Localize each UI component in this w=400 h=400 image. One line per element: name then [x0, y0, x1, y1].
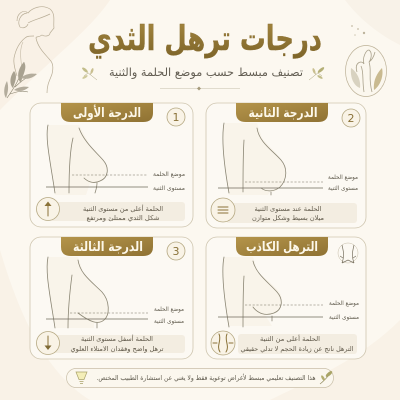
- heading tab: [236, 237, 328, 256]
- disclaimer text: هذا التصنيف تعليمي مبسط لأغراض توعوية فقط ولا يغني عن استشارة الطبيب المختص.: [96, 373, 316, 382]
- description: الحلمة أعلى من الثنية: [260, 334, 320, 343]
- heading tab: [61, 237, 153, 256]
- heading tab: الترهل الكاذب: [246, 240, 318, 255]
- level labels: موضع الحلمة: [328, 174, 358, 181]
- number badge: 3: [172, 245, 180, 258]
- panel: third degree: [30, 237, 193, 359]
- panel: second degree: [206, 103, 366, 228]
- illustration: woman silhouette with branch: [4, 7, 54, 98]
- panel: false sagging: [206, 237, 366, 359]
- description: الحلمة أسفل مستوى الثنية: [81, 334, 153, 343]
- level labels: موضع الحلمة: [153, 171, 185, 178]
- icon: left leaf sprig: [81, 67, 97, 80]
- description: الحلمة أعلى من مستوى الثنية: [83, 204, 163, 213]
- number badge: 1: [172, 111, 180, 124]
- level labels: مستوى الثنية: [328, 185, 358, 192]
- description: [50, 334, 185, 353]
- number badge: [167, 242, 185, 260]
- level labels: [153, 171, 185, 192]
- description: ترهل واضح وفقدان الامتلاء العلوي: [70, 345, 164, 353]
- level labels: [329, 300, 359, 321]
- heading tab: الدرجة الثانية: [248, 106, 318, 121]
- heading tab: الدرجة الأولى: [73, 104, 141, 121]
- disclaimer pill: [66, 368, 334, 388]
- emblem: body in circle: [346, 25, 386, 97]
- heading tab: الدرجة الثالثة: [73, 240, 143, 255]
- subtitle: تصنيف مبسط حسب موضع الحلمة والثنية: [109, 65, 303, 80]
- icon: volume arrows: [211, 331, 235, 355]
- description: ميلان بسيط وشكل متوازن: [252, 214, 324, 222]
- level labels: موضع الحلمة: [154, 306, 184, 313]
- number badge: [342, 109, 360, 127]
- heading tab: [61, 103, 153, 122]
- description: [238, 334, 357, 354]
- breast profile diagram: [46, 257, 148, 328]
- icon: leaf sprig: [320, 370, 333, 384]
- icon: level lines: [211, 198, 235, 222]
- description: الحلمة عند مستوى الثنية: [254, 205, 322, 213]
- heading tab: [236, 103, 328, 122]
- icon: down arrow: [36, 332, 60, 354]
- breast profile diagram: [218, 123, 323, 195]
- number badge: [167, 108, 185, 126]
- level labels: مستوى الثنية: [153, 185, 185, 192]
- number badge: 2: [348, 112, 354, 125]
- level labels: [328, 174, 358, 192]
- breast profile diagram: [46, 125, 148, 195]
- icon: up arrow: [36, 198, 60, 220]
- level labels: موضع الحلمة: [329, 300, 359, 307]
- level labels: مستوى الثنية: [154, 318, 184, 325]
- description: [226, 203, 357, 223]
- icon: torso: [338, 243, 358, 263]
- description: الترهل ناتج عن زيادة الحجم لا تدلي حقيقي: [240, 345, 354, 353]
- description: [50, 202, 185, 222]
- level labels: [154, 306, 184, 325]
- level labels: مستوى الثنية: [329, 314, 359, 321]
- icon: light bulb: [76, 372, 87, 384]
- panel: first degree: [30, 103, 193, 227]
- title: درجات ترهل الثدي: [88, 19, 322, 59]
- description: شكل الثدي ممتلئ ومرتفع: [86, 214, 160, 222]
- breast profile diagram: [218, 257, 323, 327]
- icon: right leaf sprig: [309, 66, 325, 80]
- ornamental divider: [160, 86, 240, 90]
